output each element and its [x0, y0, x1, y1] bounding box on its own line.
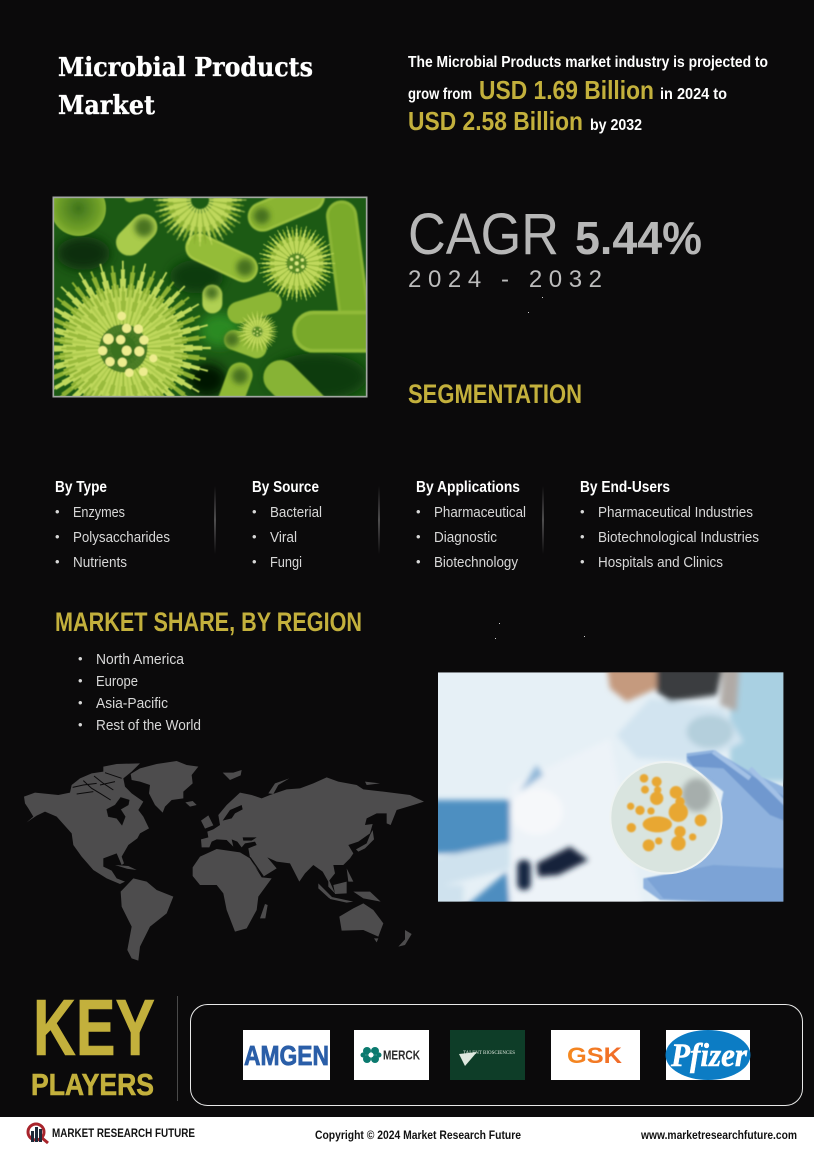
logo: merck: [354, 1030, 429, 1080]
logo: gsk: [551, 1030, 640, 1080]
column: by source: By Source: [252, 479, 319, 496]
british isles: [201, 815, 213, 829]
segmentation columns: [55, 479, 759, 571]
logo: gsk: GSK: [567, 1043, 622, 1068]
region list: North America: [96, 651, 185, 668]
footer: Copyright © 2024 Market Research Future: [315, 1128, 521, 1142]
market projection text: USD 2.58 Billion: [408, 106, 583, 136]
photo: green microbes: [52, 196, 368, 398]
japan: [356, 830, 374, 852]
spiky ball: small: [237, 311, 278, 352]
column: by source: •: [252, 554, 257, 569]
CAGR figure: CAGR: [408, 202, 559, 267]
column: by type: •: [55, 554, 60, 569]
column: by source: •: [252, 529, 257, 544]
region list: Rest of the World: [96, 717, 201, 734]
column: by source: [252, 479, 322, 571]
region list: •: [78, 651, 83, 666]
column: by applications: By Applications: [416, 479, 520, 496]
column: by end-users: Biotechnological Industries: [598, 529, 759, 546]
rod caps: [135, 208, 270, 384]
glove: [643, 750, 787, 905]
madagascar: [260, 904, 268, 918]
key players panel: [190, 1004, 802, 1106]
column: by applications: •: [416, 554, 421, 569]
CAGR figure: 2024 - 2032: [408, 266, 602, 293]
spiky ball: top center: [152, 198, 248, 246]
hudson bay and arctic channels: [73, 773, 129, 825]
logo: pfizer: [666, 1030, 750, 1080]
region list: Asia-Pacific: [96, 695, 168, 712]
photo border: [53, 197, 367, 397]
column: by type: [55, 479, 170, 571]
footer: [0, 1117, 814, 1150]
market projection text: The Microbial Products market industry is projected to: [408, 54, 768, 71]
region list: •: [78, 673, 83, 688]
column: by type: Nutrients: [73, 554, 127, 571]
australia: [339, 903, 383, 942]
column: by applications: •: [416, 529, 421, 544]
key players heading: PLAYERS: [31, 1067, 154, 1102]
logo: talent biosciences: [450, 1030, 525, 1080]
column: by end-users: •: [580, 529, 585, 544]
column: by applications: Pharmaceutical: [434, 504, 526, 521]
market projection text: in 2024 to: [660, 86, 727, 103]
logo: talent biosciences: TALENT BIOSCIENCES: [463, 1051, 515, 1056]
market projection text: USD 1.69 Billion: [479, 75, 654, 105]
column: by source: •: [252, 504, 257, 519]
rods: [129, 195, 373, 407]
title: Market: [58, 91, 155, 121]
column: by applications: Diagnostic: [434, 529, 497, 546]
arctic coast islands: [268, 778, 380, 794]
petri dish: [610, 762, 722, 873]
north america: [24, 763, 149, 884]
footer: MARKET RESEARCH FUTURE: [52, 1126, 195, 1140]
region list: •: [78, 695, 83, 710]
baltic, black and caspian seas: [223, 805, 257, 841]
column: by type: Polysaccharides: [73, 529, 170, 546]
red sea: [250, 857, 263, 877]
column: by end-users: [580, 479, 759, 571]
column: by end-users: •: [580, 504, 585, 519]
greenland: [131, 761, 198, 813]
region list: •: [78, 717, 83, 732]
stray specks: [495, 297, 585, 639]
south america: [121, 878, 173, 961]
world map: [24, 761, 424, 961]
logo: merck: MERCK: [383, 1048, 420, 1062]
column: by type: Enzymes: [73, 504, 125, 521]
column: by type: •: [55, 504, 60, 519]
icon: market research future logo: [28, 1124, 48, 1143]
logo: pfizer: Pfizer: [670, 1038, 748, 1074]
region list: Europe: [96, 673, 138, 690]
market projection text: grow from: [408, 86, 472, 103]
column: by end-users: Pharmaceutical Industries: [598, 504, 753, 521]
eurasia: [201, 777, 424, 882]
column: by source: Bacterial: [270, 504, 322, 521]
column: by type: By Type: [55, 479, 107, 496]
column: by applications: [416, 479, 526, 571]
photo: petri dish: [430, 665, 790, 908]
ball: top left: [54, 198, 107, 237]
column: by end-users: •: [580, 554, 585, 569]
key players heading: KEY: [33, 983, 155, 1072]
CAGR figure: 5.44%: [575, 212, 702, 264]
region list: [78, 651, 201, 734]
microscope: [517, 847, 588, 890]
iceland and svalbard: [185, 770, 242, 807]
spiky ball: right: [258, 225, 335, 302]
title: Microbial Products: [58, 53, 313, 83]
new zealand: [398, 930, 412, 947]
column: by applications: •: [416, 504, 421, 519]
market projection text: [408, 54, 768, 136]
heading: segmentation: SEGMENTATION: [408, 379, 582, 409]
logo: amgen: [243, 1030, 330, 1080]
column: by end-users: Hospitals and Clinics: [598, 554, 723, 571]
logo: amgen: AMGEN: [244, 1040, 329, 1071]
column: by type: •: [55, 529, 60, 544]
column: by applications: Biotechnology: [434, 554, 518, 571]
column: by source: Viral: [270, 529, 297, 546]
africa: [193, 849, 272, 932]
cuba: [115, 865, 137, 870]
heading: market share by region: MARKET SHARE, BY REGION: [55, 607, 362, 637]
title: [58, 53, 313, 121]
column: by source: Fungi: [270, 554, 302, 571]
key players heading: [31, 983, 155, 1102]
southeast asia islands: [318, 868, 381, 903]
market projection text: by 2032: [590, 117, 642, 134]
column: by end-users: By End-Users: [580, 479, 670, 496]
spiky ball: large: [54, 260, 212, 396]
CAGR figure: [408, 202, 702, 293]
